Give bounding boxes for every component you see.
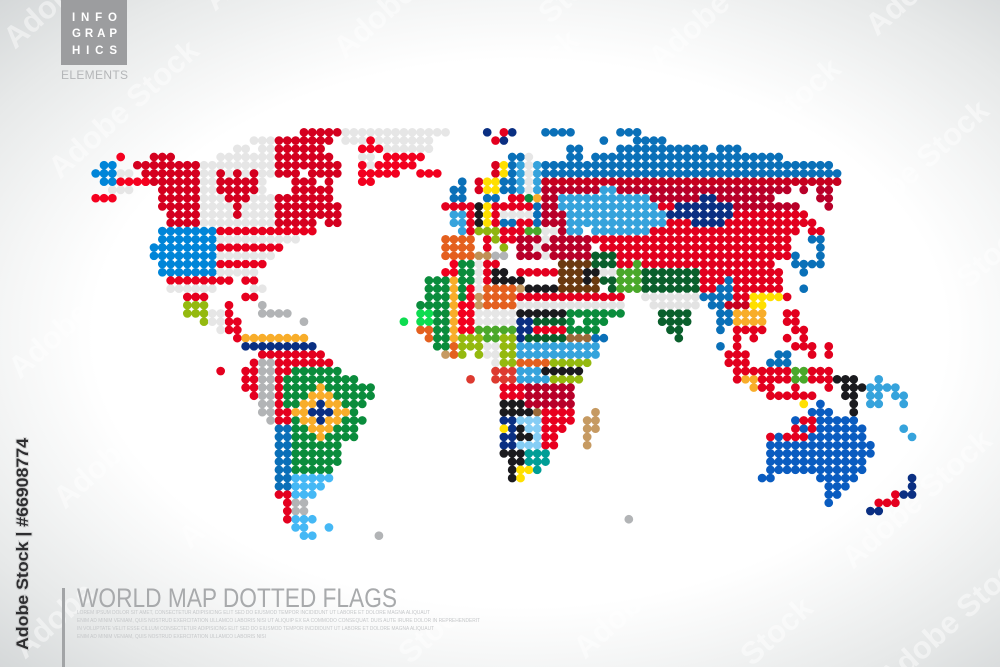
side image credit: Adobe Stock | #66908774: [13, 437, 32, 650]
sahara white: [479, 264, 512, 363]
east africa black: [504, 371, 579, 478]
peru grey: [262, 363, 304, 511]
indonesia green: [795, 371, 804, 379]
congo light blue: [521, 346, 596, 379]
italy green: [479, 231, 504, 248]
korea and far east blue: [795, 239, 820, 289]
mexico green: [187, 305, 204, 322]
ukraine and turkey dark red: [521, 239, 546, 256]
stock watermark pattern: Adobe: [706, 445, 801, 535]
stock watermark pattern: Adobe Stock: [566, 512, 731, 665]
baltic orange: [536, 197, 538, 199]
stock watermark pattern: Adobe Stock: [501, 417, 666, 570]
amber column: [453, 280, 455, 338]
mongolia navy block: [670, 198, 729, 223]
papua black: [837, 379, 862, 412]
brazil navy globe: [312, 404, 329, 420]
white column: [504, 157, 554, 256]
world map of flag dots: [96, 132, 912, 536]
north africa red: [446, 264, 471, 330]
arctic islands: [487, 132, 512, 141]
argentina light blue: [296, 478, 329, 536]
colombia and venezuela bands: [246, 337, 304, 339]
central asia green: [620, 264, 637, 289]
south america: [221, 338, 629, 536]
stock watermark pattern: Adobe Stock: [421, 22, 586, 175]
stock watermark pattern: Adobe Stock: [834, 422, 999, 575]
usa white stripes: [171, 239, 296, 289]
germany black: [478, 206, 480, 223]
usa red stripes: [171, 231, 312, 280]
russia dark red band: [546, 190, 829, 256]
southeast asia red: [729, 313, 829, 396]
stock watermark pattern: Adobe Stock: [1, 232, 166, 385]
west africa green: [421, 264, 621, 346]
southeast asia blue: [704, 280, 729, 346]
mediterranean tan: [479, 255, 487, 257]
bright green dots: [404, 313, 429, 322]
central africa green: [479, 330, 512, 338]
china south dark red: [729, 304, 746, 306]
badge: infographics elements: INFO: [72, 12, 117, 24]
finland and baltic light blue: [454, 165, 537, 231]
badge: infographics elements: [61, 0, 128, 82]
nigeria orange: [421, 289, 546, 363]
lorem text: LOREM IPSUM DOLOR SIT AMET, CONSECTETUR ADIPISICING ELIT SED DO EIUSMOD TEMPOR INCIDIDUNT UT LABORE ET DOLORE MAGNA ALIQUAUT: [77, 610, 430, 616]
balkans green: [529, 230, 537, 232]
central america red: [187, 297, 254, 338]
tan dots: [446, 289, 521, 355]
pacific light blue: [870, 379, 912, 437]
alaska and aleutian red dots: [96, 157, 146, 198]
lorem text: ENIM AD MINIM VENIAM, QUIS NOSTRUD EXERCITATION ULLAMCO LABORIS NISI UT ALIQUIP EX EA COMMODO CONSEQUAT. DUIS AUTE IRURE DOLOR IN REPREHENDERIT: [77, 618, 480, 624]
angola pale blue: [521, 420, 537, 445]
australia blue field: [762, 404, 870, 503]
new zealand red: [879, 495, 895, 503]
aegean grey: [496, 255, 504, 257]
borneo blue: [770, 355, 787, 363]
badge: infographics elements: GRAP: [72, 28, 117, 40]
brown dots: [537, 338, 587, 412]
canada white field: [112, 132, 446, 223]
namibia yellow: [504, 429, 529, 478]
spain orange: [446, 239, 471, 256]
greenland red dots: [362, 141, 437, 182]
kenya red: [504, 330, 571, 445]
lorem text: ENIM AD MINIM VENIAM, QUIS NOSTRUD EXERCITATION ULLAMCO LABORIS NISI: [77, 634, 266, 640]
caption bar: [62, 588, 65, 667]
orange block: [737, 313, 762, 388]
arctic red dots: [496, 132, 504, 141]
russia upper red band: [546, 181, 837, 183]
caucasus dark green: [529, 256, 696, 338]
russia blue band: [546, 132, 837, 173]
stock watermark pattern: Adobe: [6, 575, 101, 665]
chile red tail: [279, 495, 287, 519]
red band and peru: [221, 355, 329, 420]
timor yellow: [803, 403, 805, 405]
lorem text: IN VOLUPTATE VELIT ESSE CILLUM CONSECTETUR ADIPISICING ELIT SED DO EIUSMOD TEMPOR INCIDIDUNT UT LABORE ET DOLORE MAGNA ALIQUAUT: [77, 626, 434, 632]
russia bright red field: [596, 206, 820, 297]
tanzania dark red: [529, 388, 571, 404]
stock watermark pattern: Stock: [251, 92, 338, 175]
sahel lime: [462, 338, 587, 379]
blue dots: [596, 337, 604, 339]
canada red bands and maple leaf: [137, 132, 337, 223]
scandinavia red: [479, 165, 496, 190]
afghan black: [496, 272, 596, 289]
europe: [446, 132, 554, 256]
iran brown: [562, 264, 596, 289]
kazakh light blue block: [562, 190, 662, 231]
caribbean grey: [262, 305, 304, 322]
north america: [96, 132, 446, 338]
alaska dots: [96, 165, 112, 182]
yellow star band: [754, 297, 779, 305]
stock watermark pattern: Stock: [331, 302, 418, 385]
central europe red: [446, 198, 529, 248]
scandinavia yellow: [487, 165, 504, 190]
sudan black band: [521, 312, 562, 314]
asia: [487, 132, 837, 396]
caption block: [62, 583, 480, 667]
central america white: [212, 313, 221, 330]
navy band: [246, 345, 312, 347]
title: WORLD MAP DOTTED FLAGS: [77, 583, 397, 613]
stock watermark pattern: Stock: [251, 222, 338, 305]
germany yellow: [486, 206, 488, 223]
south atlantic grey islands: [379, 519, 629, 536]
usa blue canton: [154, 231, 212, 272]
middle east and india white: [521, 272, 696, 305]
australia union jack red: [770, 420, 812, 437]
estonia green: [528, 197, 530, 199]
oceania: [762, 379, 912, 511]
horn navy: [504, 322, 529, 445]
stock watermark pattern: Adobe Stock: [171, 402, 336, 555]
lorem text: [77, 610, 480, 640]
badge: infographics elements: ELEMENTS: [61, 68, 128, 82]
south africa teal: [529, 453, 546, 470]
stock watermark pattern: Adobe Stock: [831, 92, 996, 245]
new zealand navy: [870, 478, 912, 511]
chile blue: [279, 429, 287, 486]
stock watermark pattern: Adobe Stock: [46, 362, 211, 515]
africa: [404, 264, 621, 478]
gulf of guinea brick: [471, 371, 512, 379]
northern europe blue: [454, 157, 537, 223]
brazil yellow diamond: [296, 388, 346, 437]
stock watermark pattern: Stock: [761, 50, 848, 133]
stock watermark pattern: Adobe Stock: [41, 32, 206, 185]
brazil green field: [287, 371, 371, 470]
middle east red: [487, 264, 621, 297]
madagascar tan: [587, 412, 596, 445]
stock watermark pattern: Adobe Stock: [376, 372, 541, 525]
badge: infographics elements: HICS: [72, 45, 117, 57]
